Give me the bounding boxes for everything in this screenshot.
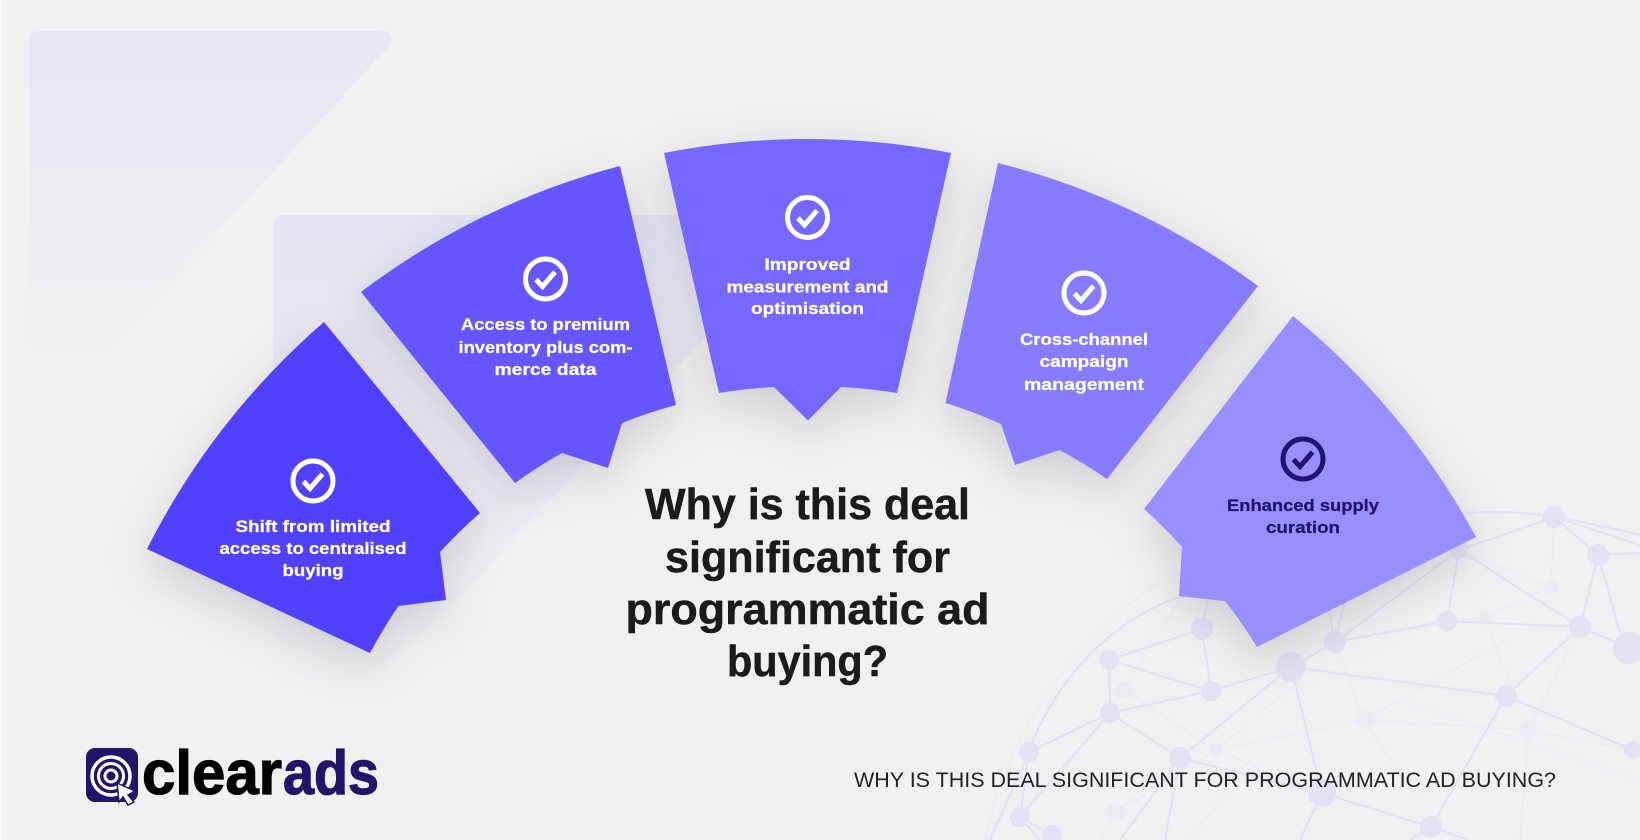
- panel 4 text: [1020, 330, 1148, 394]
- panel 3 text: [726, 255, 888, 318]
- panel 2 text: Access to premium: [461, 315, 630, 334]
- panel 5 text: curation: [1266, 518, 1340, 537]
- panel 1 text: [220, 517, 406, 580]
- icon: check circle: [1064, 273, 1104, 313]
- logo wordmark: clear: [142, 739, 282, 808]
- main heading: [626, 480, 990, 686]
- main heading: significant for: [665, 533, 950, 582]
- background network globe: [985, 506, 1640, 840]
- panel 3 text: optimisation: [751, 299, 864, 318]
- icon: check circle: [526, 259, 566, 299]
- icon: check circle: [293, 461, 333, 501]
- background shape: top-left: [29, 31, 391, 360]
- panel 1 text: access to centralised: [220, 539, 406, 558]
- footer caption: WHY IS THIS DEAL SIGNIFICANT FOR PROGRAMMATIC AD BUYING?: [854, 769, 1556, 792]
- main heading: programmatic ad: [626, 585, 990, 634]
- panel 2 shape: [361, 166, 676, 483]
- panel 1 text: buying: [282, 561, 344, 580]
- panel 3 text: measurement and: [726, 278, 888, 296]
- panel 1 text: Shift from limited: [236, 517, 390, 536]
- panel 3 shape: [664, 139, 951, 420]
- panel 5 text: Enhanced supply: [1227, 496, 1380, 515]
- icon: dark check circle: [1283, 439, 1323, 479]
- panel 3: measurement: [664, 139, 951, 420]
- logo: clearads: [86, 739, 379, 808]
- panel 3 text: Improved: [764, 255, 850, 274]
- icon: check circle: [788, 198, 828, 238]
- panel 2: premium inventory: [361, 166, 676, 483]
- panel 2 text: merce data: [494, 360, 597, 379]
- logo icon: [86, 748, 138, 805]
- panel 1 shape: [147, 322, 480, 653]
- panel 4: cross-channel: [946, 163, 1258, 479]
- panel 4 text: Cross-channel: [1020, 330, 1148, 349]
- main heading: buying?: [727, 637, 888, 686]
- logo wordmark: ads: [283, 739, 379, 808]
- panel 4 text: management: [1024, 375, 1144, 394]
- panel 2 text: [458, 315, 632, 379]
- panel 1: centralised buying: [147, 322, 480, 653]
- background shape: centre-left: [273, 215, 822, 700]
- panel 2 text: inventory plus com-: [458, 338, 632, 357]
- panel 5 shape: [1144, 316, 1476, 647]
- panel 4 text: campaign: [1040, 352, 1128, 371]
- panel 5 text: [1227, 496, 1380, 537]
- main heading: Why is this deal: [645, 480, 970, 529]
- panel 4 shape: [946, 163, 1258, 479]
- panel 5: supply curation: [1144, 316, 1476, 647]
